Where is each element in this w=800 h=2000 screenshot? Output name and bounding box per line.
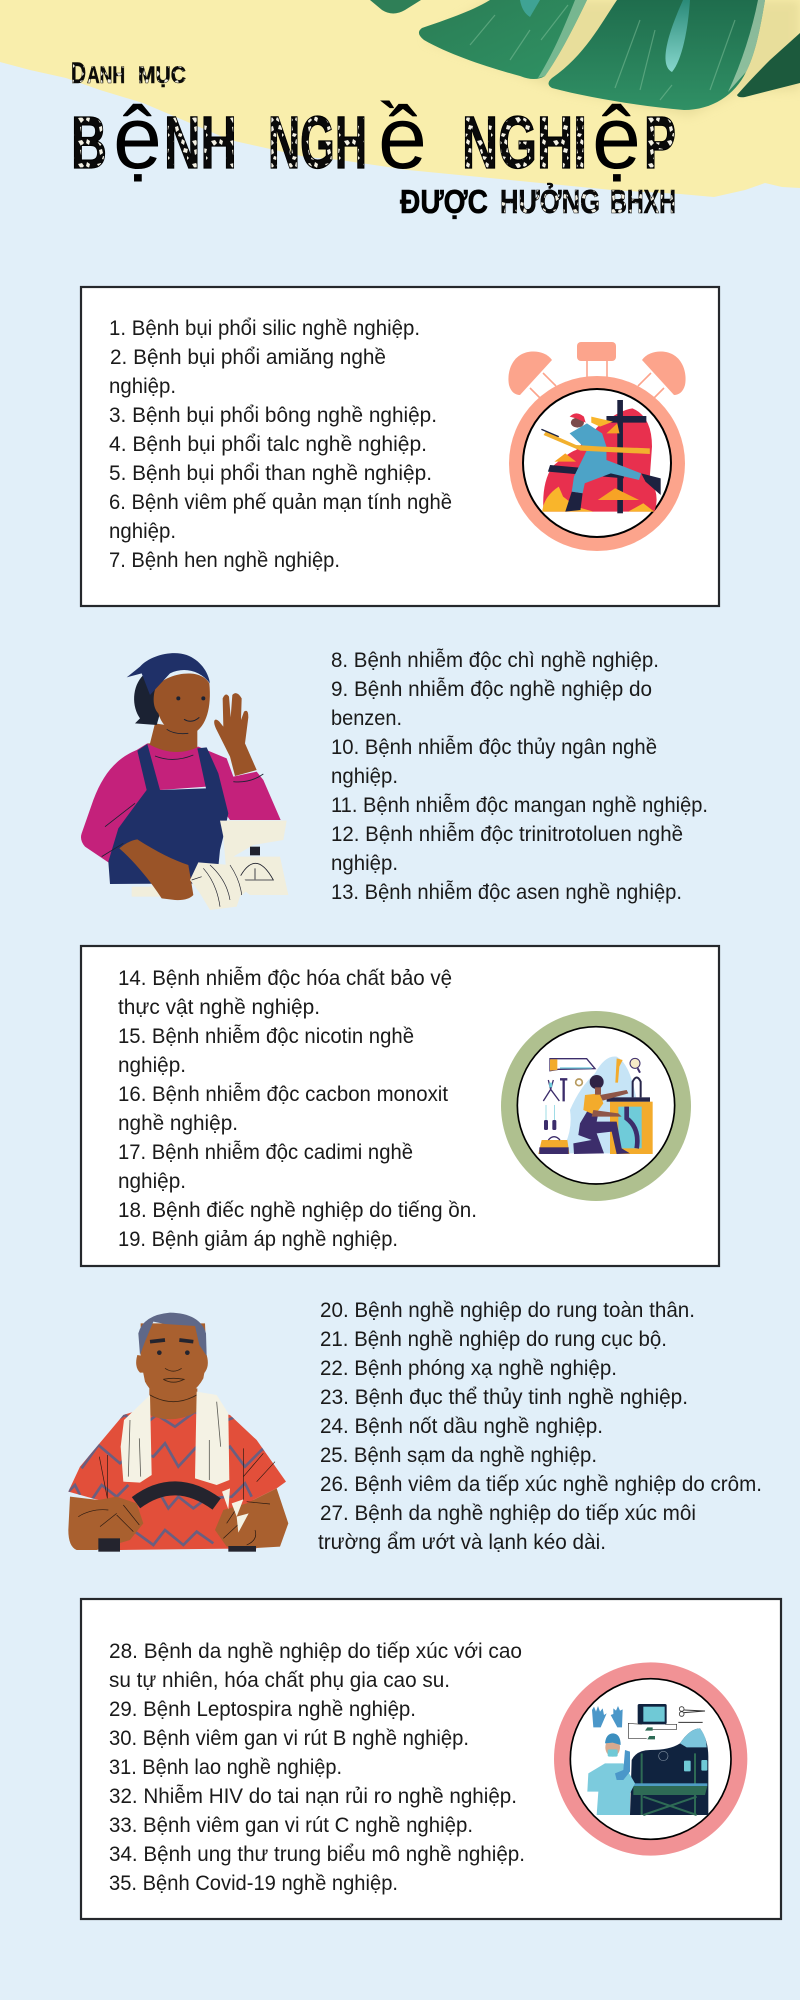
- title: Danh mục: ANH: [87, 62, 125, 89]
- text block: items 28-35: 31. Bệnh lao nghề nghiệp.: [109, 1756, 342, 1779]
- text block: items 1-7: [109, 317, 452, 572]
- text block: items 1-7: 4. Bệnh bụi phổi talc nghề nghiệp.: [109, 433, 427, 456]
- text block: items 28-35: 34. Bệnh ung thư trung biểu mô nghề nghiệp.: [109, 1843, 525, 1866]
- text block: items 1-7: 1. Bệnh bụi phổi silic nghề nghiệp.: [109, 317, 420, 340]
- panel: diseases 1-7: [81, 287, 719, 606]
- panel: diseases 28-35: [81, 1599, 781, 1919]
- text block: items 20-27: 21. Bệnh nghề nghiệp do rung cục bộ.: [320, 1328, 667, 1351]
- text block: items 28-35: 30. Bệnh viêm gan vi rút B nghề nghiệp.: [109, 1727, 469, 1750]
- torn yellow paper header: [0, 0, 800, 197]
- title: được hưởng BHXH: HƯỞNG: [500, 183, 600, 220]
- text block: items 14-19: thực vật nghề nghiệp.: [118, 996, 320, 1019]
- text block: items 14-19: nghề nghiệp.: [118, 1112, 238, 1135]
- text block: items 14-19: 14. Bệnh nhiễm độc hóa chất bảo vệ: [118, 967, 452, 990]
- text block: items 1-7: 6. Bệnh viêm phế quản mạn tính nghề: [109, 491, 452, 514]
- text block: items 28-35: 32. Nhiễm HIV do tai nạn rủi ro nghề nghiệp.: [109, 1785, 517, 1808]
- text block: items 1-7: 5. Bệnh bụi phổi than nghề nghiệp.: [109, 462, 432, 485]
- text block: items 8-13: nghiệp.: [331, 765, 398, 788]
- text block: items 28-35: su tự nhiên, hóa chất phụ gia cao su.: [109, 1669, 450, 1692]
- illustration: woman with scale: [81, 653, 288, 910]
- panel: diseases 14-19: [81, 946, 719, 1266]
- text block: items 28-35: 35. Bệnh Covid-19 nghề nghiệp.: [109, 1872, 398, 1895]
- text block: items 28-35: 28. Bệnh da nghề nghiệp do tiếp xúc với cao: [109, 1640, 522, 1663]
- text block: items 20-27: 22. Bệnh phóng xạ nghề nghiệp.: [320, 1357, 617, 1380]
- text block: items 20-27: 25. Bệnh sạm da nghề nghiệp.: [320, 1444, 597, 1467]
- text block: items 8-13: nghiệp.: [331, 852, 398, 875]
- text block: items 14-19: [118, 967, 477, 1251]
- title: Danh mục: D: [71, 57, 86, 90]
- title: được hưởng BHXH: BHXH: [610, 183, 676, 220]
- text block: items 14-19: nghiệp.: [118, 1054, 186, 1077]
- text block: items 8-13: 10. Bệnh nhiễm độc thủy ngân nghề: [331, 736, 657, 759]
- title: Danh mục: MỤC: [138, 62, 186, 89]
- text block: items 8-13: [331, 649, 708, 904]
- title: Bệnh nghề nghiệp: B: [71, 101, 107, 184]
- text block: items 1-7: nghiệp.: [109, 375, 176, 398]
- text block: items 1-7: nghiệp.: [109, 520, 176, 543]
- monstera leaf: [370, 0, 800, 116]
- text block: items 28-35: 29. Bệnh Leptospira nghề nghiệp.: [109, 1698, 416, 1721]
- text block: items 20-27: 26. Bệnh viêm da tiếp xúc nghề nghiệp do crôm.: [320, 1473, 762, 1496]
- text block: items 14-19: 18. Bệnh điếc nghề nghiệp do tiếng ồn.: [118, 1199, 477, 1222]
- text block: items 8-13: 8. Bệnh nhiễm độc chì nghề nghiệp.: [331, 649, 659, 672]
- text block: items 14-19: nghiệp.: [118, 1170, 186, 1193]
- text block: items 20-27: 20. Bệnh nghề nghiệp do rung toàn thân.: [320, 1299, 695, 1322]
- text block: items 8-13: 11. Bệnh nhiễm độc mangan nghề nghiệp.: [331, 794, 708, 817]
- text block: items 8-13: 12. Bệnh nhiễm độc trinitrotoluen nghề: [331, 823, 683, 846]
- text block: items 20-27: trường ẩm ướt và lạnh kéo dài.: [318, 1531, 606, 1554]
- text block: items 28-35: 33. Bệnh viêm gan vi rút C nghề nghiệp.: [109, 1814, 473, 1837]
- title: được hưởng BHXH: ĐƯỢC: [400, 183, 488, 220]
- illustration: man driving with towel: [68, 1313, 288, 1552]
- text block: items 28-35: [109, 1640, 525, 1895]
- icon: surgeon in pink ring: [554, 1662, 747, 1856]
- text block: items 14-19: 15. Bệnh nhiễm độc nicotin nghề: [118, 1025, 414, 1048]
- text block: items 14-19: 19. Bệnh giảm áp nghề nghiệp.: [118, 1228, 398, 1251]
- text block: items 1-7: 7. Bệnh hen nghề nghiệp.: [109, 549, 340, 572]
- text block: items 20-27: 23. Bệnh đục thể thủy tinh nghề nghiệp.: [320, 1386, 688, 1409]
- title: Bệnh nghề nghiệp: ệ: [113, 88, 162, 187]
- text block: items 20-27: [318, 1299, 762, 1554]
- title: Bệnh nghề nghiệp: ệ: [592, 88, 641, 187]
- title: Bệnh nghề nghiệp: NGHI: [462, 101, 587, 184]
- text block: items 20-27: 27. Bệnh da nghề nghiệp do tiếp xúc môi: [320, 1502, 696, 1525]
- text block: items 8-13: 9. Bệnh nhiễm độc nghề nghiệp do: [331, 678, 652, 701]
- text block: items 14-19: 17. Bệnh nhiễm độc cadimi nghề: [118, 1141, 413, 1164]
- title: Bệnh nghề nghiệp: ề: [378, 88, 427, 187]
- icon: plumber in green ring: [501, 1011, 691, 1201]
- text block: items 20-27: 24. Bệnh nốt dầu nghề nghiệp.: [320, 1415, 603, 1438]
- text block: items 1-7: 2. Bệnh bụi phổi amiăng nghề: [110, 346, 386, 369]
- icon: stopwatch with firefighter: [508, 342, 686, 551]
- title: Bệnh nghề nghiệp: NH: [164, 101, 237, 184]
- text block: items 1-7: 3. Bệnh bụi phổi bông nghề nghiệp.: [109, 404, 437, 427]
- text block: items 8-13: benzen.: [331, 707, 402, 730]
- title: Bệnh nghề nghiệp: P: [644, 101, 676, 184]
- text block: items 14-19: 16. Bệnh nhiễm độc cacbon monoxit: [118, 1083, 448, 1106]
- text block: items 8-13: 13. Bệnh nhiễm độc asen nghề nghiệp.: [331, 881, 682, 904]
- title: Bệnh nghề nghiệp: NGH: [268, 101, 367, 184]
